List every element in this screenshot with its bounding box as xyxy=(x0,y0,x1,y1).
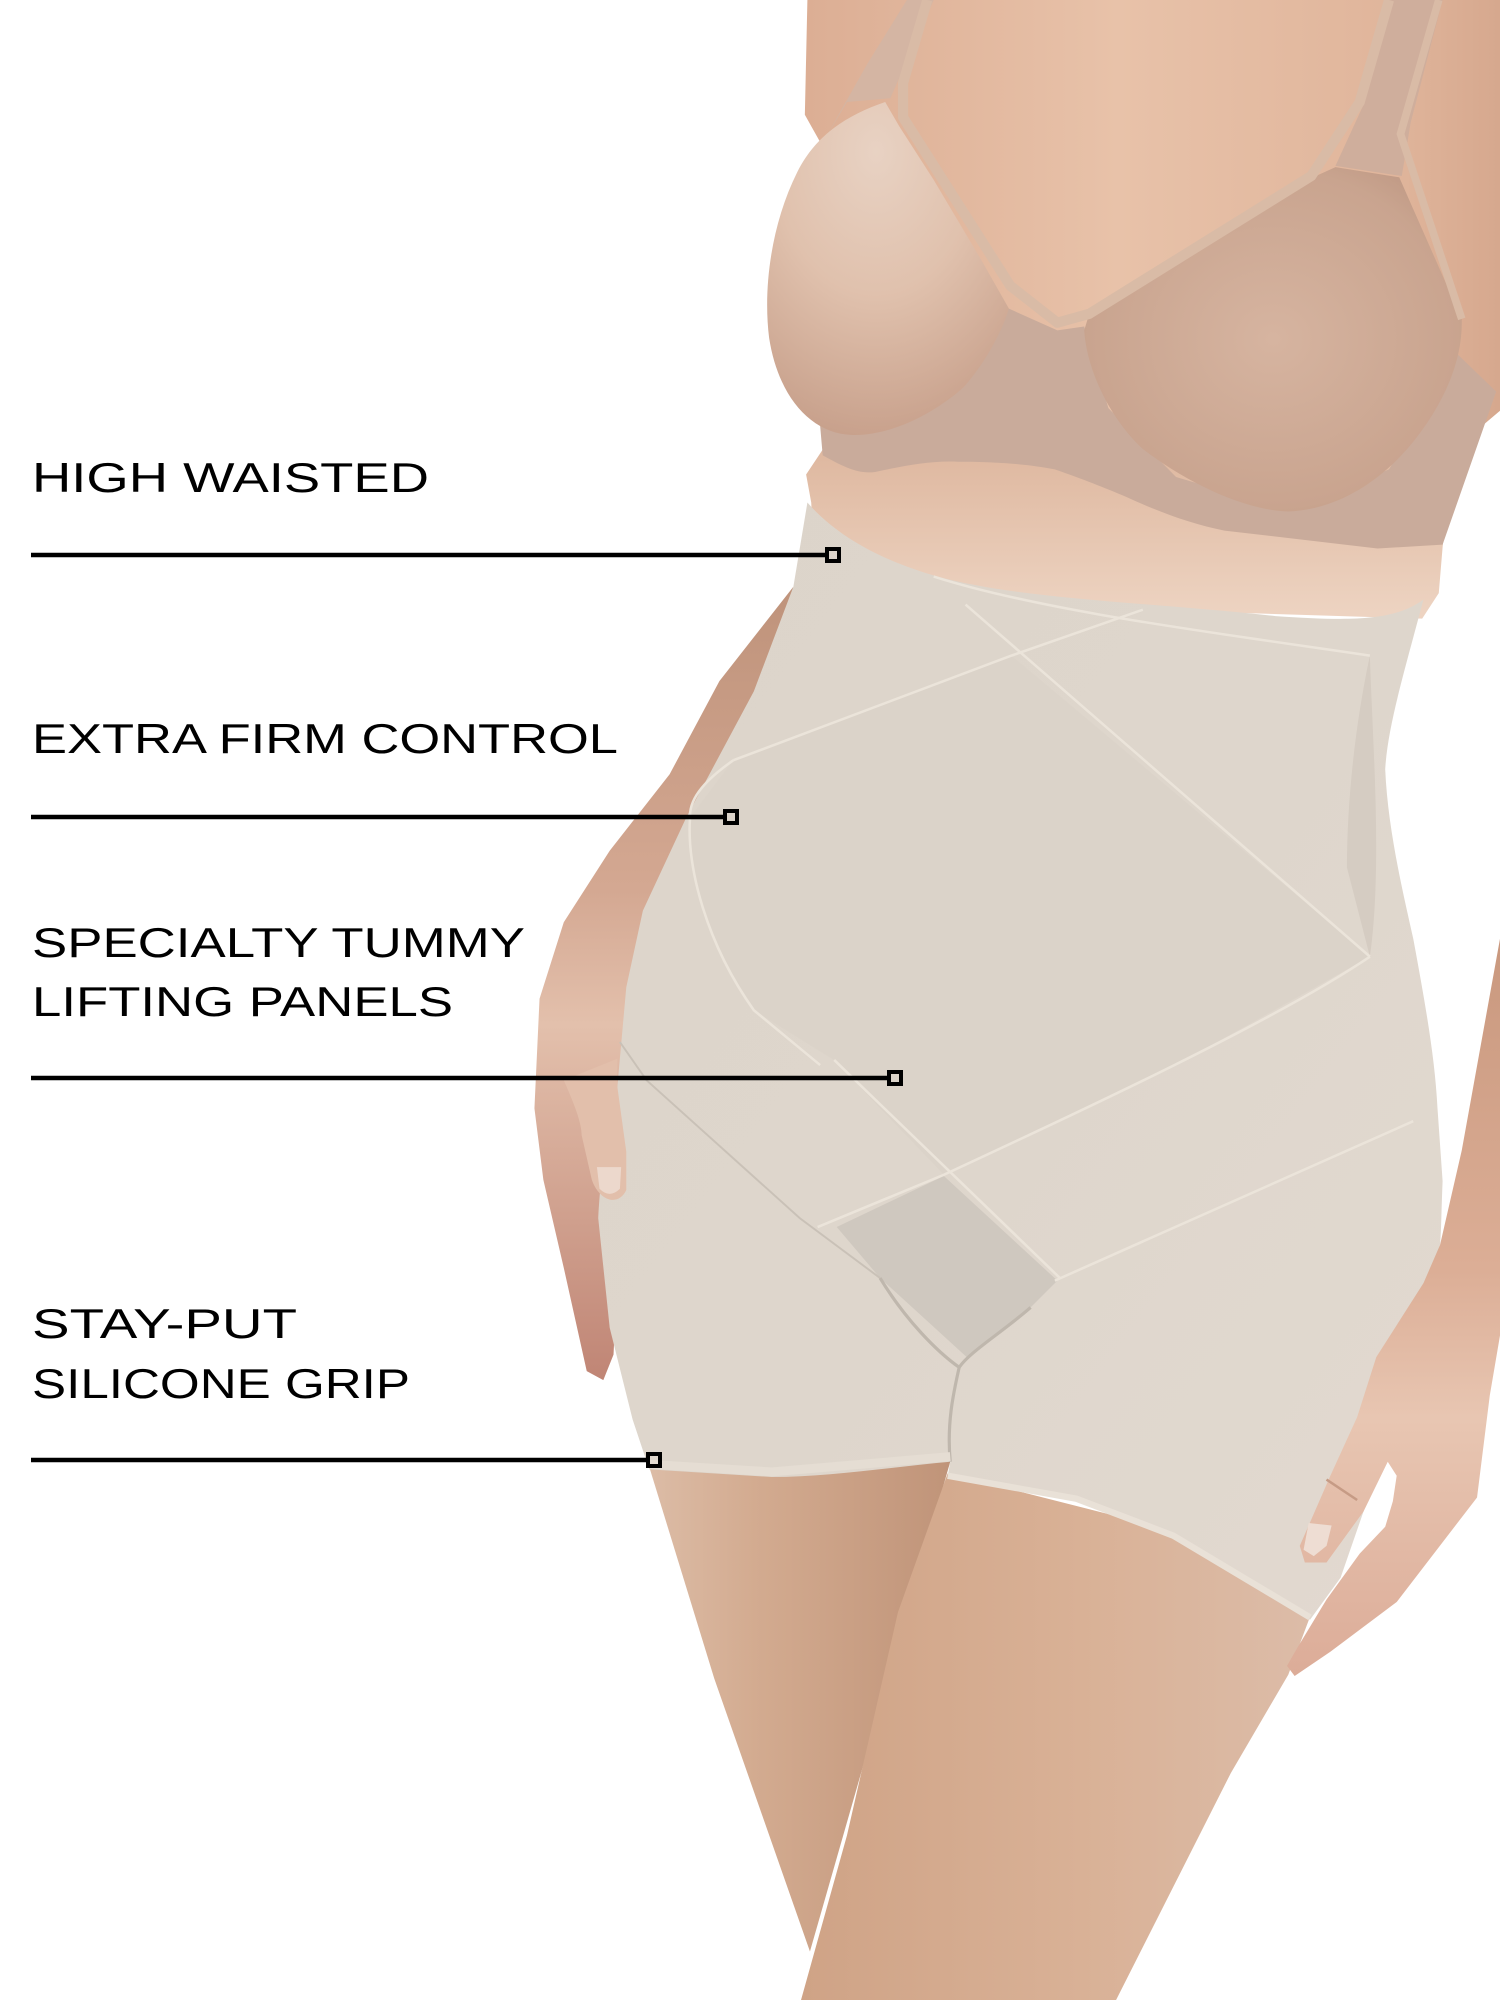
tummy panel shading xyxy=(690,656,1370,1175)
right arm and hand xyxy=(1287,939,1500,1676)
thumb xyxy=(564,1059,626,1200)
callout: stay-put silicone grip xyxy=(31,1300,660,1466)
marker xyxy=(889,1072,901,1084)
marker xyxy=(725,811,737,823)
leg seam xyxy=(620,1042,880,1278)
marker xyxy=(827,549,839,561)
left strap xyxy=(823,0,934,143)
leader line xyxy=(31,1458,648,1462)
callout: specialty tummy lifting panels xyxy=(31,919,901,1084)
fingernail xyxy=(1304,1523,1332,1556)
label: specialty tummy lifting panels: SPECIALTY TUMMY xyxy=(32,919,525,966)
bra xyxy=(767,0,1496,548)
leader line xyxy=(31,553,827,557)
label: stay-put silicone grip xyxy=(32,1300,410,1407)
label: high waisted: HIGH WAISTED xyxy=(32,454,429,501)
callout: high waisted xyxy=(31,454,839,561)
right side trim xyxy=(1401,0,1462,319)
mesh gusset xyxy=(837,1176,1057,1358)
left leg xyxy=(649,1462,950,1952)
model figure wearing the shapewear xyxy=(534,0,1500,2000)
bare waist skin xyxy=(806,440,1454,619)
panel seams xyxy=(690,577,1413,1281)
side shadow panel xyxy=(1347,656,1376,957)
right-leg hem shading xyxy=(948,1476,1310,1617)
label: stay-put silicone grip: SILICONE GRIP xyxy=(32,1360,410,1407)
left cup xyxy=(767,102,1009,435)
left-leg hem shading xyxy=(649,1457,950,1472)
neckline trim xyxy=(903,0,1389,323)
right strap xyxy=(1335,0,1443,176)
arm, hand and fingers xyxy=(1287,939,1500,1676)
high-waisted shapewear shorts xyxy=(598,503,1443,1620)
right cup xyxy=(1084,167,1462,511)
left hand thumb xyxy=(564,1059,626,1200)
leader line xyxy=(31,815,725,819)
knuckle crease xyxy=(1327,1480,1357,1500)
upper torso skin xyxy=(805,0,1500,446)
label: specialty tummy lifting panels xyxy=(32,919,525,1025)
callout: extra firm control xyxy=(31,715,737,823)
left arm xyxy=(534,587,793,1380)
bra band and centre mesh xyxy=(820,309,1496,548)
garment body xyxy=(598,503,1443,1620)
right leg xyxy=(801,1473,1311,2000)
marker xyxy=(648,1454,660,1466)
label: extra firm control: EXTRA FIRM CONTROL xyxy=(32,715,618,762)
label: stay-put silicone grip: STAY-PUT xyxy=(32,1300,297,1347)
thumbnail xyxy=(597,1167,621,1194)
inner thigh creases xyxy=(880,1278,1031,1462)
leader line xyxy=(31,1076,889,1080)
label: specialty tummy lifting panels: LIFTING PANELS xyxy=(32,978,453,1025)
